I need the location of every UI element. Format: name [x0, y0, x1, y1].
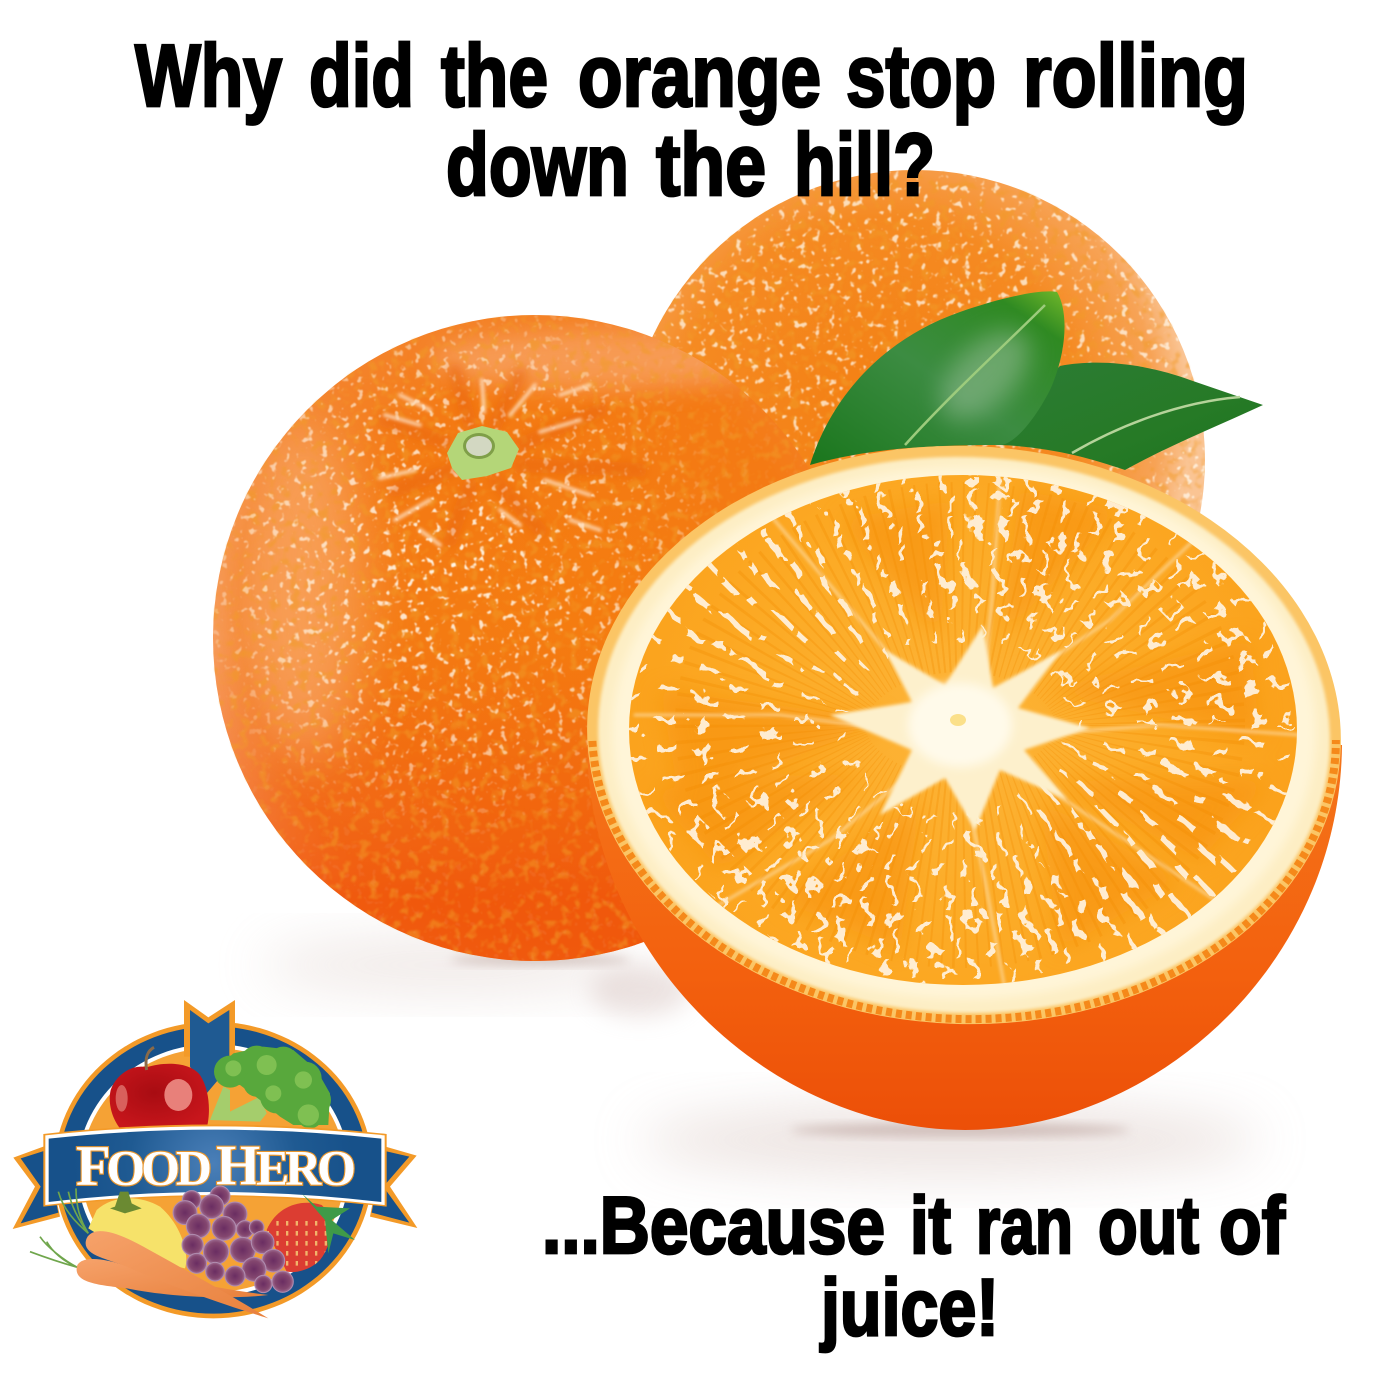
ribbon top — [184, 1000, 235, 1093]
ribbon tail: left — [13, 1146, 60, 1229]
ribbon tail: right — [370, 1146, 417, 1228]
icon: strawberry — [267, 1193, 355, 1272]
title: hill? — [794, 115, 935, 214]
title: down — [446, 115, 629, 214]
banner text: FOOD HERO — [76, 1136, 356, 1198]
leaf: front — [810, 291, 1065, 465]
rim dots — [588, 740, 1340, 1024]
punchline: ...Because — [542, 1181, 885, 1271]
icon: squash — [88, 1192, 186, 1268]
title: Why — [135, 26, 282, 125]
segment membranes — [635, 480, 1300, 990]
icon: stem — [447, 426, 519, 480]
title: orange — [578, 26, 821, 125]
darker juice wedges — [650, 490, 1270, 950]
cut orange half — [577, 433, 1351, 1130]
icon: apple — [110, 1047, 209, 1128]
ring — [54, 1022, 373, 1318]
title: rolling — [1023, 26, 1248, 125]
title: the — [441, 26, 548, 125]
punchline: ran — [976, 1181, 1073, 1271]
stem folds — [380, 370, 640, 545]
fibres — [770, 577, 1150, 873]
radial flecks — [635, 477, 1285, 973]
shadow: whole orange — [260, 939, 640, 991]
title: stop — [846, 26, 996, 125]
banner — [43, 1124, 387, 1207]
punchline: of — [1219, 1181, 1286, 1271]
peel body — [587, 745, 1342, 1130]
title: the — [656, 115, 766, 214]
punchline: juice! — [819, 1263, 999, 1353]
leaf: rear — [1000, 363, 1263, 470]
punchline — [542, 1181, 1286, 1353]
punchline: it — [910, 1181, 951, 1271]
title: did — [309, 26, 414, 125]
logo: Food Hero — [13, 1000, 417, 1318]
core — [830, 625, 1090, 830]
icon: grapes — [173, 1186, 293, 1293]
back orange — [625, 170, 1205, 750]
title — [135, 26, 1248, 214]
punchline: out — [1098, 1181, 1199, 1271]
icon: carrots — [30, 1188, 268, 1318]
shadow: cut orange — [590, 964, 1260, 1174]
pith — [577, 433, 1351, 1037]
whole orange — [213, 315, 857, 961]
icon: broccoli — [210, 1046, 331, 1128]
flesh — [620, 470, 1310, 990]
leaves — [810, 291, 1263, 470]
